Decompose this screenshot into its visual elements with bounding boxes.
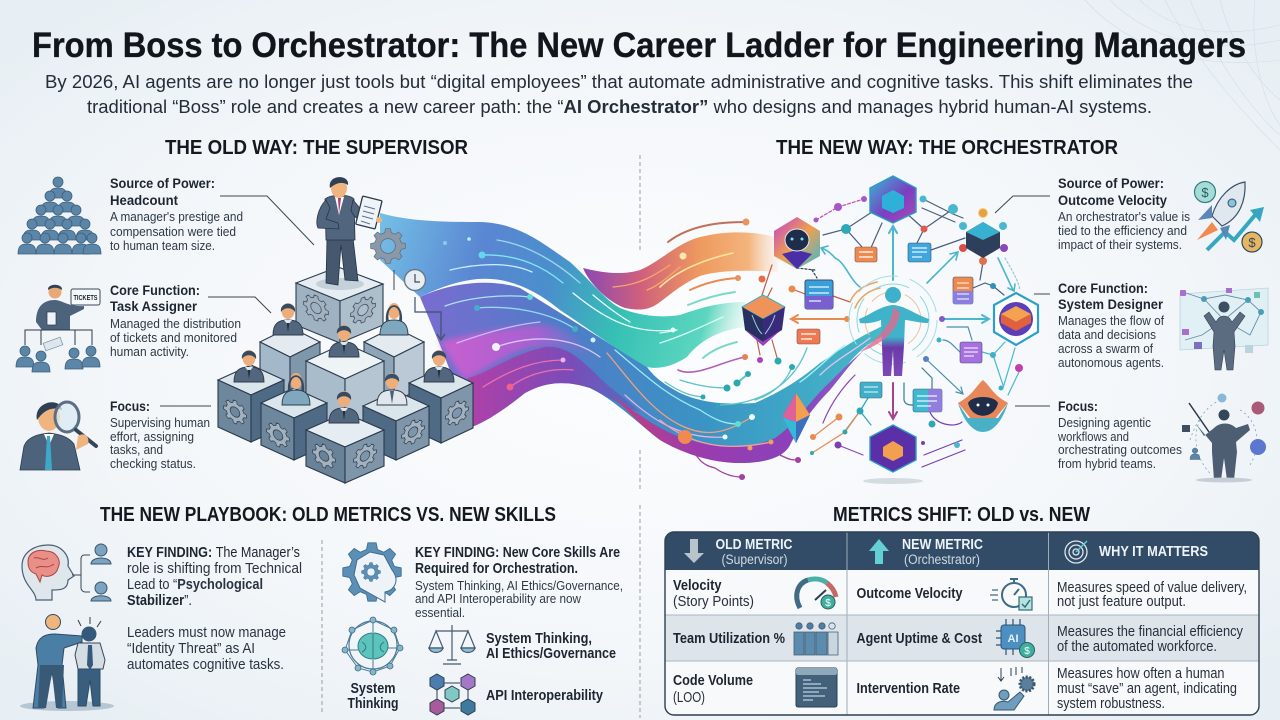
label: system thinking: Thinking <box>348 695 398 712</box>
icon: conductor <box>1182 394 1266 482</box>
text: core function task assigner: Core Function: <box>110 283 200 298</box>
text: key finding left: Lead to “Psychological <box>127 576 263 593</box>
data cards <box>797 243 982 412</box>
text: key finding left <box>127 544 302 609</box>
text: core function task assigner: Managed the distribution <box>110 317 241 331</box>
intro text: By 2026, AI agents are no longer just tools but “digital employees” that automate administrative and cognitive tasks. This shift eliminates the <box>45 71 1193 92</box>
text: core function task assigner: of tickets and monitored <box>110 331 237 345</box>
row: velocity: Measures speed of value delivery, <box>1057 580 1247 596</box>
text: source of power outcome velocity: An orchestrator's value is <box>1058 210 1190 224</box>
text: api: API Interoperability <box>486 687 604 704</box>
text: key finding left: KEY FINDING: The Manager’s <box>127 544 300 561</box>
text: identity threat <box>127 624 286 673</box>
intro text <box>45 71 1193 117</box>
row: utilization: AI <box>1008 633 1018 645</box>
table: metrics shift <box>665 532 1259 715</box>
row: velocity <box>673 578 1247 610</box>
row: utilization: Team Utilization % <box>673 631 785 647</box>
row: code volume <box>673 666 1237 712</box>
text: focus designing <box>1057 399 1182 471</box>
text: focus supervising: Focus: <box>110 399 150 414</box>
text: focus designing: from hybrid teams. <box>1058 457 1156 471</box>
agent: right ring <box>994 293 1038 345</box>
row: velocity: (Story Points) <box>673 594 754 610</box>
icon: scales <box>429 625 475 664</box>
row: velocity: $ <box>825 598 831 609</box>
text: core function task assigner <box>110 283 241 359</box>
icon: brain head <box>22 544 111 601</box>
row: code volume: Code Volume <box>673 673 753 689</box>
network dots <box>757 196 1023 455</box>
text: core function task assigner: Task Assigner <box>110 299 198 314</box>
text: source of power headcount: Headcount <box>110 193 178 208</box>
text: key finding right: essential. <box>415 606 465 620</box>
text: source of power headcount <box>110 176 243 253</box>
text: key finding left: Stabilizer”. <box>127 592 192 609</box>
supervisor figure <box>316 177 382 290</box>
agent: bottom hexagon <box>870 425 916 472</box>
grey row band <box>666 615 1258 661</box>
text: source of power headcount: compensation were tied <box>110 225 236 239</box>
text: ethics: System Thinking, <box>486 630 592 647</box>
panel: psychological stabilizer finding <box>20 544 302 711</box>
row: utilization: $ <box>1024 646 1030 657</box>
text: core function task assigner: human activity. <box>110 345 189 359</box>
front tier cubes <box>218 365 473 483</box>
row: code volume: (LOO) <box>673 690 705 706</box>
table header: WHY IT MATTERS <box>1099 544 1208 560</box>
icon: system designer at network wall <box>1180 288 1268 370</box>
callout leader lines left <box>160 196 314 406</box>
row: code volume: must “save” an agent, indicating <box>1057 681 1237 697</box>
text: key finding right <box>415 544 623 620</box>
text: ethics: AI Ethics/Governance <box>486 645 616 662</box>
icon: task assigner: TICKETS <box>74 293 98 302</box>
text: source of power outcome velocity: impact of their systems. <box>1058 238 1182 252</box>
center dashed divider <box>322 155 640 718</box>
row: utilization: Agent Uptime & Cost <box>856 631 982 647</box>
orchestrator rings <box>849 276 937 364</box>
text: core function system designer: System Designer <box>1058 297 1164 312</box>
text: identity threat: “Identity Threat” as AI <box>127 640 255 657</box>
gear and clock <box>371 229 445 340</box>
callout leader lines right <box>995 196 1050 406</box>
heading: old way: THE OLD WAY: THE SUPERVISOR <box>165 137 469 159</box>
text: core function system designer: Core Function: <box>1058 281 1148 296</box>
row: code volume: system robustness. <box>1057 696 1165 712</box>
icon: rocket and coins <box>1194 182 1264 252</box>
icon: magnifier supervisor <box>20 402 96 470</box>
top cube <box>296 267 383 343</box>
text: core function system designer: autonomous agents. <box>1058 356 1164 370</box>
icon: headcount pyramid <box>18 177 101 254</box>
row: utilization: Measures the financial efficiency <box>1057 624 1244 640</box>
heading: new playbook: THE NEW PLAYBOOK: OLD METRICS VS. NEW SKILLS <box>100 504 556 526</box>
icon: two people identity threat <box>20 614 114 711</box>
row: velocity: not just feature output. <box>1057 594 1186 610</box>
text: key finding right: and API Interoperability are now <box>415 592 582 606</box>
label: system thinking <box>348 680 398 712</box>
table header: OLD METRIC <box>716 537 793 553</box>
text: key finding right: System Thinking, AI Ethics/Governance, <box>415 579 623 593</box>
text: source of power outcome velocity <box>1058 176 1190 252</box>
label: system thinking: System <box>350 680 396 697</box>
row: utilization: of the automated workforce. <box>1057 639 1217 655</box>
text: focus designing: orchestrating outcomes <box>1058 443 1182 457</box>
table header <box>665 532 1259 570</box>
row: code volume: Measures how often a human <box>1057 666 1224 682</box>
agent: lower right robot <box>958 380 1008 432</box>
panel: supervisor pyramid <box>218 177 473 483</box>
agent: top hexagon <box>870 176 916 223</box>
row: utilization <box>673 619 1244 658</box>
text: source of power headcount: to human team size. <box>110 239 215 253</box>
team members on blocks <box>234 303 454 423</box>
text: source of power headcount: Source of Power: <box>110 176 215 191</box>
text: source of power outcome velocity: Outcome Velocity <box>1058 193 1167 208</box>
text: key finding right: Required for Orchestration. <box>415 560 578 577</box>
text: core function system designer: data and decisions <box>1058 328 1156 342</box>
text: identity threat: Leaders must now manage <box>127 624 286 641</box>
table rules <box>665 532 1259 715</box>
agent: lower left diamond <box>782 393 810 443</box>
text: source of power headcount: A manager's prestige and <box>110 210 243 224</box>
icon: rocket and coins: $ <box>1201 185 1209 200</box>
row: code volume: Intervention Rate <box>856 681 960 697</box>
network links <box>757 199 1020 467</box>
intro text: traditional “Boss” role and creates a new career path: the “AI Orchestrator” who designs and manages hybrid human-AI systems. <box>87 96 1152 117</box>
text: identity threat: automates cognitive tasks. <box>127 656 284 673</box>
text: focus supervising: effort, assigning <box>110 430 194 444</box>
row: velocity: Outcome Velocity <box>856 586 962 602</box>
orchestrator figure <box>859 287 929 376</box>
table header: NEW METRIC <box>902 537 983 553</box>
icon: brain network <box>342 617 403 675</box>
table header: (Orchestrator) <box>904 552 980 567</box>
text: source of power outcome velocity: tied to the efficiency and <box>1058 224 1187 238</box>
text: key finding right: KEY FINDING: New Core Skills Are <box>415 544 620 561</box>
table header: (Supervisor) <box>722 552 788 567</box>
heading: new way: THE NEW WAY: THE ORCHESTRATOR <box>776 137 1119 159</box>
text: focus designing: Focus: <box>1058 399 1098 414</box>
text: focus supervising: tasks, and <box>110 443 163 457</box>
text: focus designing: workflows and <box>1057 430 1129 444</box>
agent: upper right cube <box>966 222 1000 258</box>
text: core function system designer: across a swarm of <box>1058 342 1153 356</box>
icon: rocket and coins: $ <box>1248 235 1256 250</box>
text: focus supervising: checking status. <box>110 457 196 471</box>
text: ethics <box>486 630 616 662</box>
text: source of power outcome velocity: Source of Power: <box>1058 176 1164 191</box>
second tier cubes <box>260 327 424 429</box>
icon: api cubes <box>430 674 475 715</box>
icon: gear head <box>343 543 401 602</box>
text: focus supervising <box>110 399 210 471</box>
ribbon flow from supervisor to orchestrator <box>380 213 892 480</box>
text: focus designing: Designing agentic <box>1058 416 1151 430</box>
agent: upper left robot <box>774 217 820 269</box>
agent: left cube <box>742 295 785 346</box>
text: key finding left: role is shifting from Technical <box>127 560 302 577</box>
icon: task assigner <box>16 285 100 372</box>
text: core function system designer <box>1058 281 1164 370</box>
panel: new core skills finding <box>342 543 623 715</box>
row: velocity: Velocity <box>673 578 722 594</box>
heading: metrics shift: METRICS SHIFT: OLD vs. NEW <box>833 504 1090 526</box>
text: core function system designer: Manages the flow of <box>1058 314 1164 328</box>
text: focus supervising: Supervising human <box>110 416 210 430</box>
panel: orchestrator network <box>742 176 1038 484</box>
